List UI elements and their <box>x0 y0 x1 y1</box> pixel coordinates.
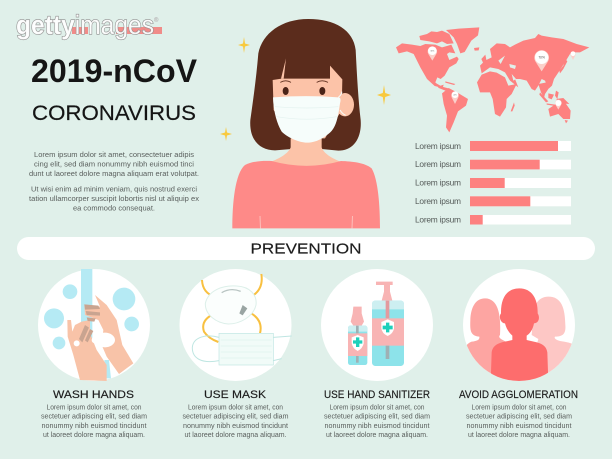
madagascar <box>511 102 515 111</box>
icon: sanitizer bottles <box>348 282 404 366</box>
description <box>41 402 147 439</box>
description: Lorem ipsum dolor sit amet, con <box>46 402 142 412</box>
japan <box>559 59 567 73</box>
description: sectetuer adipiscing elit, sed diam <box>324 412 430 421</box>
scandinavian sea cut <box>498 56 516 81</box>
heading: AVOID AGGLOMERATION <box>459 389 578 401</box>
map pin: australia <box>555 100 562 110</box>
person: back left <box>465 298 510 382</box>
description: Lorem ipsum dolor sit amet, con <box>472 402 566 412</box>
description: nonummy nibh euismod tincidunt <box>466 421 572 430</box>
central america <box>435 82 449 91</box>
face <box>273 66 342 138</box>
circle <box>463 269 575 381</box>
banner heading: PREVENTION <box>250 242 362 258</box>
africa <box>477 71 517 117</box>
map pin: north america: 30% <box>430 50 435 52</box>
panel: use mask <box>180 269 292 439</box>
face mask <box>273 96 341 143</box>
mask pleats <box>275 107 338 119</box>
description: ut laoreet dolore magna aliquam. <box>184 430 286 439</box>
british isles <box>481 55 487 63</box>
new guinea <box>556 98 569 104</box>
arctic archipelago <box>419 31 454 44</box>
description <box>324 402 430 439</box>
intro text block: ea commodo consequat. <box>73 204 155 212</box>
panel: avoid agglomeration <box>459 269 578 439</box>
eurasia <box>480 34 589 91</box>
intro text block: cing elit, sed diam nonummy nibh euismod tinci <box>34 160 194 168</box>
neck <box>270 138 342 166</box>
row 4: Lorem ipsum <box>415 196 461 206</box>
description: Lorem ipsum dolor sit amet, con <box>330 402 424 412</box>
circle <box>180 269 292 381</box>
southeast asia islands <box>539 91 559 106</box>
row 3 <box>415 178 571 188</box>
indochina and malay peninsula <box>538 82 548 98</box>
description: nonummy nibh euismod tincidunt <box>183 421 289 430</box>
hair <box>250 19 361 151</box>
description: sectetuer adipiscing elit, sed diam <box>41 412 147 421</box>
row 3: Lorem ipsum <box>415 178 461 188</box>
watermark red strip <box>72 27 162 34</box>
description <box>466 402 572 439</box>
heading: USE MASK <box>204 389 266 401</box>
row 1: Lorem ipsum <box>415 141 461 151</box>
panel: use hand sanitizer <box>321 269 433 439</box>
ear loop <box>338 92 346 115</box>
intro text block <box>29 150 199 212</box>
bangs highlight <box>281 58 286 79</box>
subtitle: CORONAVIRUS <box>32 102 196 125</box>
row 2 <box>415 159 571 169</box>
bar chart <box>415 141 571 224</box>
intro text block: dunt ut laoreet dolore magna aliquam erat volutpat. <box>29 169 199 178</box>
north america <box>396 43 459 88</box>
intro text block: tation ullamcorper suscipit lobortis nisl ut aliquip ex <box>29 194 199 203</box>
description: ut laoreet dolore magna aliquam. <box>43 430 145 439</box>
description: nonummy nibh euismod tincidunt <box>42 421 147 430</box>
map pin: asia: 70% <box>538 55 545 59</box>
heading: USE HAND SANITIZER <box>324 389 430 401</box>
intro text block: Lorem ipsum dolor sit amet, consectetuer adipis <box>34 150 194 159</box>
registered mark: ® <box>154 17 159 24</box>
circle <box>321 269 433 381</box>
icon: hands under water <box>44 269 139 381</box>
map pin: japan <box>570 51 576 60</box>
description: ut laoreet dolore magna aliquam. <box>468 430 570 439</box>
map pin: south america: 20% <box>453 94 457 96</box>
row 5 <box>415 214 571 224</box>
watermark text: gettyimages <box>16 10 154 40</box>
greenland <box>446 27 479 53</box>
person: back right <box>527 297 575 382</box>
description: sectetuer adipiscing elit, sed diam <box>182 412 288 421</box>
africa, eurasia, oceania <box>477 34 589 123</box>
australia <box>548 102 571 119</box>
description <box>182 402 289 439</box>
row 2: Lorem ipsum <box>415 159 461 169</box>
title: 2019-nCoV <box>31 53 198 89</box>
row 5: Lorem ipsum <box>415 214 461 224</box>
ear <box>336 93 354 116</box>
watermark <box>16 10 162 40</box>
eyebrows and eyes <box>280 81 328 95</box>
iceland <box>474 47 479 51</box>
americas <box>396 27 487 132</box>
description: sectetuer adipiscing elit, sed diam <box>466 412 572 421</box>
intro text block: Ut wisi enim ad minim veniam, quis nostrud exerci <box>31 184 197 194</box>
icon: group of people <box>465 288 575 382</box>
prevention banner <box>17 237 595 260</box>
description: Lorem ipsum dolor sit amet, con <box>188 402 283 412</box>
circle <box>38 269 150 381</box>
panel: wash hands <box>38 269 150 439</box>
south america <box>442 88 468 132</box>
row 1 <box>415 141 571 151</box>
person: front <box>491 288 548 382</box>
sleeve folds <box>260 216 352 228</box>
world map <box>396 27 589 132</box>
large bottle <box>372 282 404 366</box>
sparkles <box>220 37 391 141</box>
description: nonummy nibh euismod tincidunt <box>324 421 430 430</box>
description: ut laoreet dolore magna aliquam. <box>326 430 428 439</box>
row 4 <box>415 196 571 206</box>
heading: WASH HANDS <box>53 389 134 401</box>
caribbean <box>445 81 455 85</box>
small bottle <box>348 307 367 365</box>
shirt <box>232 161 380 228</box>
tasmania and new zealand <box>565 120 568 123</box>
woman wearing mask illustration <box>232 19 380 228</box>
icon: masks <box>192 274 292 365</box>
